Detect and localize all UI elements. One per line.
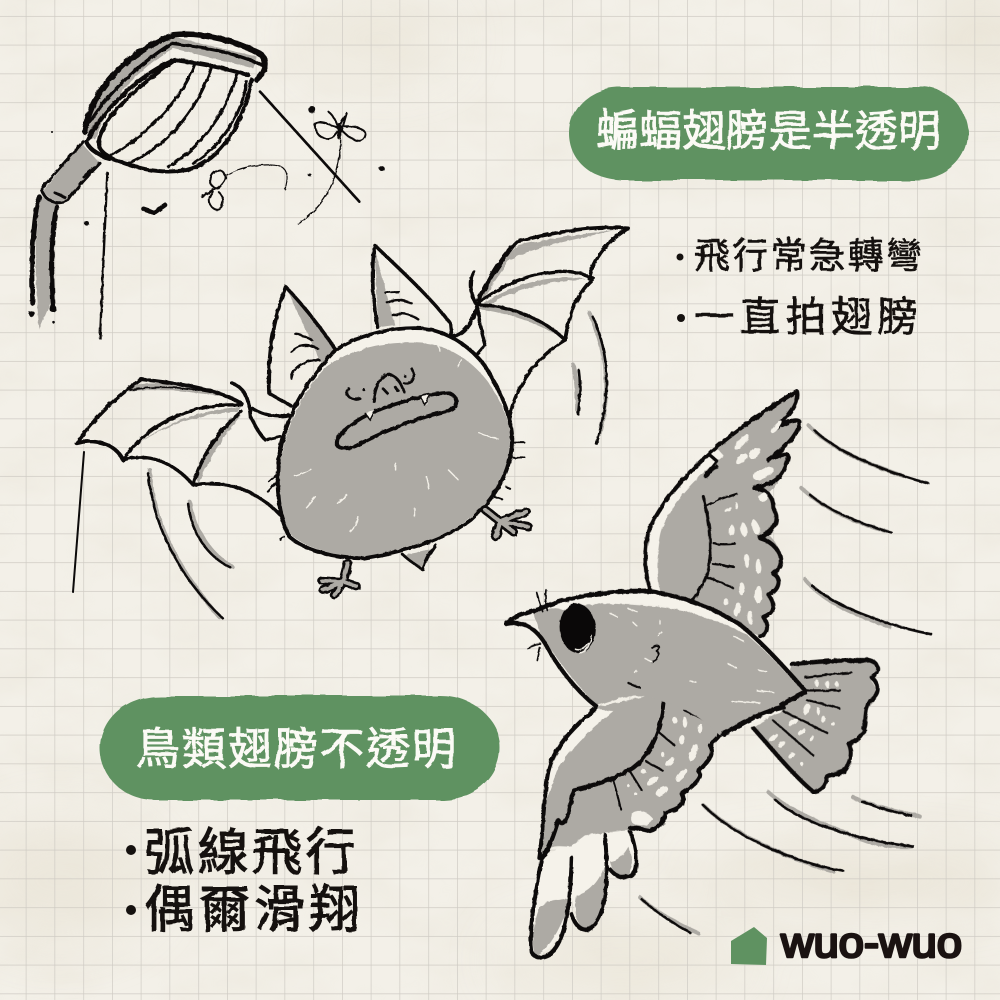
bat wing left [77, 379, 289, 530]
small insect [51, 131, 165, 324]
moth: upper right [298, 106, 384, 224]
bat face [347, 368, 414, 402]
illustration: bat [77, 227, 628, 618]
bullet list: bird flight: 弧線飛行 [144, 824, 356, 881]
bat wing right [452, 227, 628, 417]
moth: centre [202, 165, 287, 209]
tail white spots [768, 679, 838, 766]
upper wing white feather spots [724, 419, 783, 624]
icon: house [731, 927, 767, 965]
lower wing white spots [627, 717, 702, 825]
bullet list: bird flight [126, 824, 360, 938]
bird body and head [506, 590, 805, 736]
bat foot left [322, 563, 356, 595]
body white marks [610, 609, 773, 703]
lamp pole and neck [29, 142, 100, 329]
bullet list: bat flight [676, 235, 922, 340]
illustration: street lamp with moths [29, 34, 384, 338]
bullet list: bird flight: 偶爾滑翔 [144, 881, 360, 938]
bat tail membrane [402, 545, 436, 570]
bat foot right [486, 510, 528, 537]
bird eye [557, 601, 599, 656]
lamp head [83, 34, 359, 338]
bullet list: bat flight: 飛行常急轉彎 [694, 235, 922, 276]
heading pill: bird wings: 鳥類翅膀不透明 [136, 725, 456, 774]
long vertical line from lamp light [73, 452, 84, 592]
bat body [268, 328, 524, 558]
bat motion lines [148, 313, 607, 618]
bird primary feathers [531, 828, 637, 957]
bird upper wing [645, 391, 800, 636]
bat right ear [373, 245, 451, 334]
illustration: bird [506, 391, 932, 957]
heading pill: bird wings [100, 696, 500, 800]
heading pill: bat wings [569, 87, 968, 180]
bat left ear [269, 287, 336, 406]
bird lower wing [539, 696, 722, 858]
heading pill: bat wings: 蝙蝠翅膀是半透明 [596, 108, 941, 156]
logo: wuo-wuo: wuo-wuo [780, 919, 962, 967]
bird motion lines [640, 425, 932, 933]
bird tail [753, 660, 878, 792]
bat mouth and fangs [336, 393, 456, 448]
bullet list: bat flight: 一直拍翅膀 [694, 294, 918, 340]
